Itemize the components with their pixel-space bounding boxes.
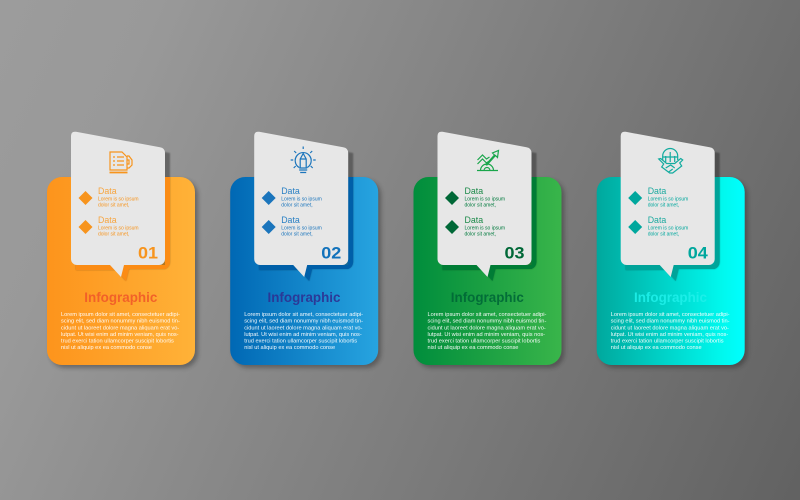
text: dolor sit amet, [98, 232, 129, 238]
panel shadow [416, 180, 564, 368]
body text: scing elit, sed diam nonummy nibh euismod tin- [244, 318, 363, 324]
diamond [445, 191, 459, 205]
body text: cidunt ut laoreet dolore magna aliquam erat vo- [61, 326, 179, 332]
text: Lorem is so ipsum [281, 196, 322, 202]
text: Lorem is so ipsum [98, 196, 139, 202]
body text: scing elit, sed diam nonummy nibh euismod tin- [611, 318, 730, 324]
bullet 2 [628, 215, 688, 238]
body text: trud exerci tation ullamcorper suscipit lobortis [611, 338, 724, 344]
note shadow on panel [626, 177, 720, 281]
note shadow on panel [442, 177, 536, 281]
bullet 1 [445, 186, 505, 208]
diamond [262, 191, 276, 205]
bullet 1 [262, 186, 322, 208]
body text: scing elit, sed diam nonummy nibh euismod tin- [428, 318, 546, 324]
text: Lorem is so ipsum [648, 196, 688, 202]
heading: Infographic [268, 289, 341, 305]
bullet 2 [445, 215, 505, 238]
label: Data [98, 215, 117, 225]
panel shadow [600, 180, 748, 368]
bullet 1 [628, 186, 688, 208]
body text: lutpat. Ut wisi enim ad minim veniam, quis nos- [428, 332, 545, 338]
panel body [230, 177, 378, 365]
note [71, 132, 165, 277]
diamond [628, 191, 642, 205]
body text: cidunt ut laoreet dolore magna aliquam erat vo- [244, 326, 363, 332]
number: 04 [688, 243, 708, 262]
note shadow [76, 136, 170, 281]
note [254, 132, 348, 277]
panel shadow [233, 180, 381, 368]
note [621, 132, 715, 277]
body text: nisl ut aliquip ex ea commodo conse [244, 345, 335, 351]
body text: lutpat. Ut wisi enim ad minim veniam, quis nos- [611, 332, 728, 338]
text: dolor sit amet, [464, 202, 496, 208]
diamond [78, 191, 92, 205]
text: dolor sit amet, [98, 202, 129, 208]
label: Data [464, 215, 483, 225]
label: Data [464, 186, 483, 196]
bullet 2 [78, 215, 139, 238]
label: Data [98, 186, 117, 196]
icon: growth arrow and gear [477, 150, 498, 170]
text: dolor sit amet, [281, 202, 313, 208]
label: Data [648, 215, 666, 225]
body text: trud exerci tation ullamcorper suscipit lobortis [61, 338, 174, 344]
body text: scing elit, sed diam nonummy nibh euismod tin- [61, 318, 180, 324]
text: dolor sit amet, [648, 232, 679, 238]
label: Data [281, 186, 300, 196]
diamond [262, 220, 276, 234]
diamond [445, 220, 459, 234]
body text: cidunt ut laoreet dolore magna aliquam erat vo- [611, 326, 729, 332]
diamond [628, 220, 642, 234]
text: dolor sit amet, [648, 202, 679, 208]
panel body [47, 177, 195, 365]
panel: card 02 [230, 132, 381, 368]
note shadow [259, 136, 353, 281]
diamond [78, 220, 92, 234]
text: Lorem is so ipsum [464, 196, 505, 202]
body text: nisl ut aliquip ex ea commodo conse [61, 345, 152, 351]
text: dolor sit amet, [281, 232, 313, 238]
heading: Infographic [451, 289, 524, 305]
body text: nisl ut aliquip ex ea commodo conse [428, 345, 518, 351]
note shadow on panel [259, 177, 353, 281]
body text: trud exerci tation ullamcorper suscipit lobortis [428, 338, 541, 344]
heading: Infographic [84, 289, 157, 305]
icon: document checklist [110, 152, 132, 172]
body text: Lorem ipsum dolor sit amet, consectetuer adipi- [611, 312, 730, 318]
text: Lorem is so ipsum [648, 226, 688, 232]
text: Lorem is so ipsum [98, 226, 139, 232]
bullet 1 [78, 186, 139, 208]
panel: card 01 [47, 132, 198, 368]
label: Data [281, 215, 300, 225]
note shadow on panel [76, 177, 170, 281]
icon: light bulb pencil [291, 146, 316, 172]
panel body [414, 177, 562, 365]
note [438, 132, 532, 277]
heading: Infographic [634, 289, 707, 305]
label: Data [648, 186, 666, 196]
icon: handshake with people [659, 149, 683, 173]
body text: lutpat. Ut wisi enim ad minim veniam, quis nos- [244, 332, 362, 338]
panel: card 04 [597, 132, 748, 368]
text: Lorem is so ipsum [281, 226, 322, 232]
number: 02 [321, 243, 341, 262]
note shadow [442, 136, 536, 281]
text: dolor sit amet, [464, 232, 496, 238]
panel: card 03 [414, 132, 564, 368]
panel shadow [50, 180, 198, 368]
number: 01 [138, 243, 158, 262]
body text: nisl ut aliquip ex ea commodo conse [611, 345, 702, 351]
number: 03 [504, 243, 524, 262]
body text: Lorem ipsum dolor sit amet, consectetuer adipi- [244, 312, 363, 318]
body text: Lorem ipsum dolor sit amet, consectetuer adipi- [428, 312, 546, 318]
body text: lutpat. Ut wisi enim ad minim veniam, quis nos- [61, 332, 179, 338]
panel body [597, 177, 745, 365]
text: Lorem is so ipsum [464, 226, 505, 232]
body text: trud exerci tation ullamcorper suscipit lobortis [244, 338, 357, 344]
bullet 2 [262, 215, 322, 238]
note shadow [626, 136, 720, 281]
body text: cidunt ut laoreet dolore magna aliquam erat vo- [428, 326, 546, 332]
body text: Lorem ipsum dolor sit amet, consectetuer adipi- [61, 312, 180, 318]
